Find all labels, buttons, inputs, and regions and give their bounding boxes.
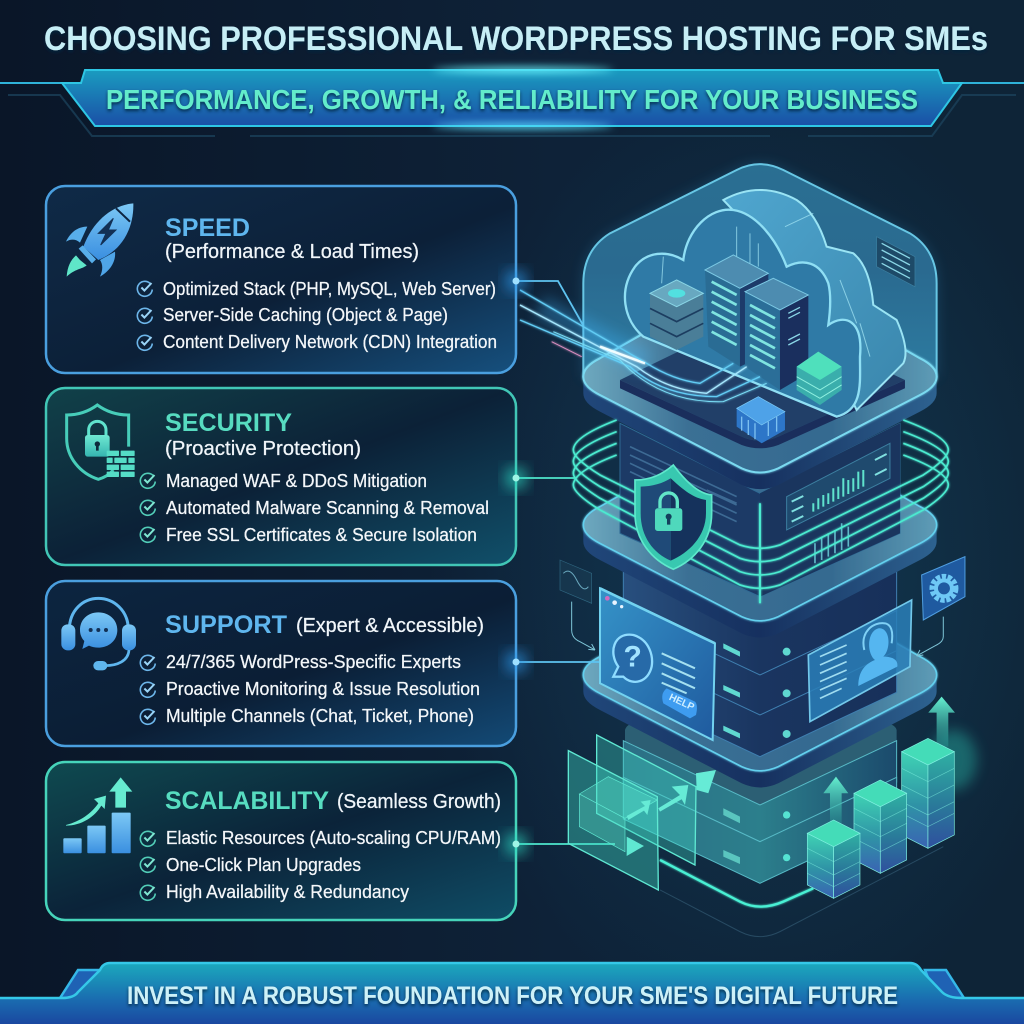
footer banner bbox=[0, 963, 1024, 1024]
subheading: security: (Proactive Protection) bbox=[165, 438, 361, 460]
list: security: Automated Malware Scanning & Removal bbox=[166, 498, 489, 518]
list: support: Proactive Monitoring & Issue Resolution bbox=[166, 679, 480, 699]
heading: support: SUPPORT bbox=[165, 611, 287, 639]
glass dome bbox=[583, 164, 937, 377]
panel: support bbox=[46, 581, 516, 746]
server tower illustration bbox=[507, 164, 977, 937]
subheading: scalability: (Seamless Growth) bbox=[337, 791, 501, 813]
help window: HELP bbox=[667, 692, 696, 713]
list: security bbox=[140, 471, 489, 545]
small chart tile bbox=[560, 560, 592, 603]
list: scalability: Elastic Resources (Auto-scaling CPU/RAM) bbox=[166, 828, 501, 848]
heading: speed: SPEED bbox=[165, 214, 250, 242]
list: scalability: One-Click Plan Upgrades bbox=[166, 855, 361, 875]
list: speed: Content Delivery Network (CDN) Integration bbox=[163, 332, 497, 352]
panel: security bbox=[46, 388, 516, 565]
list: scalability: High Availability & Redundancy bbox=[166, 882, 409, 902]
stack C bbox=[902, 738, 954, 848]
icon: shield with lock and firewall bbox=[67, 405, 135, 479]
subheading: support: (Expert & Accessible) bbox=[296, 615, 484, 637]
icon: security shield on tower bbox=[635, 465, 712, 569]
cloud bbox=[723, 190, 906, 410]
platform 3 bbox=[583, 572, 937, 787]
agent window bbox=[808, 600, 912, 722]
list: security: Free SSL Certificates & Secure Isolation bbox=[166, 525, 477, 545]
stack B bbox=[854, 780, 907, 873]
help window bbox=[600, 588, 715, 740]
dome glow bbox=[583, 164, 937, 377]
platform 1 with glass dome bbox=[520, 164, 937, 489]
scalability glass panes and cubes bbox=[568, 697, 955, 898]
help window: ? bbox=[623, 641, 642, 674]
list: speed bbox=[137, 279, 497, 352]
list: scalability bbox=[140, 828, 501, 902]
icon: rocket bbox=[66, 203, 133, 277]
list: speed: Optimized Stack (PHP, MySQL, Web Server) bbox=[163, 279, 496, 299]
subtitle text: PERFORMANCE, GROWTH, & RELIABILITY FOR YOUR BUSINESS bbox=[106, 84, 918, 115]
icon: headset with chat bubble bbox=[61, 598, 136, 670]
lower servers bbox=[623, 723, 897, 883]
heading: scalability: SCALABILITY bbox=[165, 787, 329, 815]
glass panes bbox=[568, 735, 716, 890]
panel: scalability bbox=[46, 762, 516, 920]
dome detail bbox=[877, 237, 915, 287]
panel: speed bbox=[46, 186, 516, 373]
heading: security: SECURITY bbox=[165, 409, 292, 437]
security rings bbox=[573, 420, 948, 603]
list: speed: Server-Side Caching (Object & Page) bbox=[163, 305, 448, 325]
data streams bbox=[520, 290, 767, 402]
list: support: 24/7/365 WordPress-Specific Experts bbox=[166, 652, 461, 672]
middle server bbox=[620, 423, 900, 597]
subtitle banner bbox=[0, 67, 1024, 136]
icon: growth bars and arrows bbox=[63, 777, 132, 853]
cube stacks bbox=[807, 697, 955, 898]
list: support: Multiple Channels (Chat, Ticket, Phone) bbox=[166, 706, 474, 726]
tower base: ground outline and glow ring bbox=[660, 730, 977, 937]
upper servers bbox=[623, 571, 897, 757]
platform 2 bbox=[583, 422, 937, 637]
list: security: Managed WAF & DDoS Mitigation bbox=[166, 471, 427, 491]
support windows bbox=[560, 557, 965, 740]
cloud servers bbox=[650, 255, 842, 443]
stack A bbox=[807, 820, 860, 898]
subheading: speed: (Performance & Load Times) bbox=[165, 241, 419, 263]
connector lines and dots bbox=[507, 272, 615, 853]
footer text: INVEST IN A ROBUST FOUNDATION FOR YOUR SME'S DIGITAL FUTURE bbox=[127, 982, 898, 1010]
list: support bbox=[140, 652, 480, 726]
gear tile bbox=[922, 557, 965, 620]
